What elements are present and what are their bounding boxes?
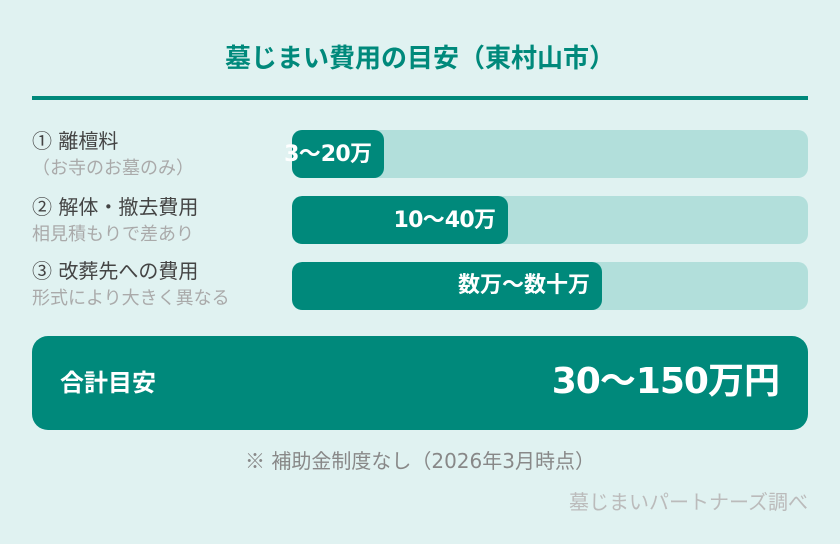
row 3 bar: 数万～数十万 (458, 273, 590, 298)
row 1 label: （お寺のお墓のみ） (32, 158, 194, 179)
row 3 bar (292, 262, 808, 310)
row 3 label: 形式により大きく異なる (32, 288, 230, 309)
row 2 label: 相見積もりで差あり (32, 224, 194, 245)
total panel: 30～150万円 (552, 361, 780, 402)
row 2 bar (292, 196, 808, 244)
row 1 label (32, 125, 194, 179)
row 2 label: ② 解体・撤去費用 (32, 191, 198, 220)
source: 墓じまいパートナーズ調べ (569, 490, 808, 514)
note: ※ 補助金制度なし（2026年3月時点） (245, 445, 595, 474)
row 1 bar (292, 130, 808, 178)
row 3 label (32, 255, 230, 309)
row 2 bar: 10～40万 (394, 208, 496, 233)
row 1 bar: 3～20万 (284, 142, 372, 167)
row 3 label: ③ 改葬先への費用 (32, 255, 198, 284)
total panel: 合計目安 (60, 369, 156, 397)
row 1 label: ① 離檀料 (32, 125, 118, 154)
row 2 label (32, 191, 198, 245)
total panel (32, 336, 808, 430)
title: 墓じまい費用の目安（東村山市） (225, 44, 615, 74)
